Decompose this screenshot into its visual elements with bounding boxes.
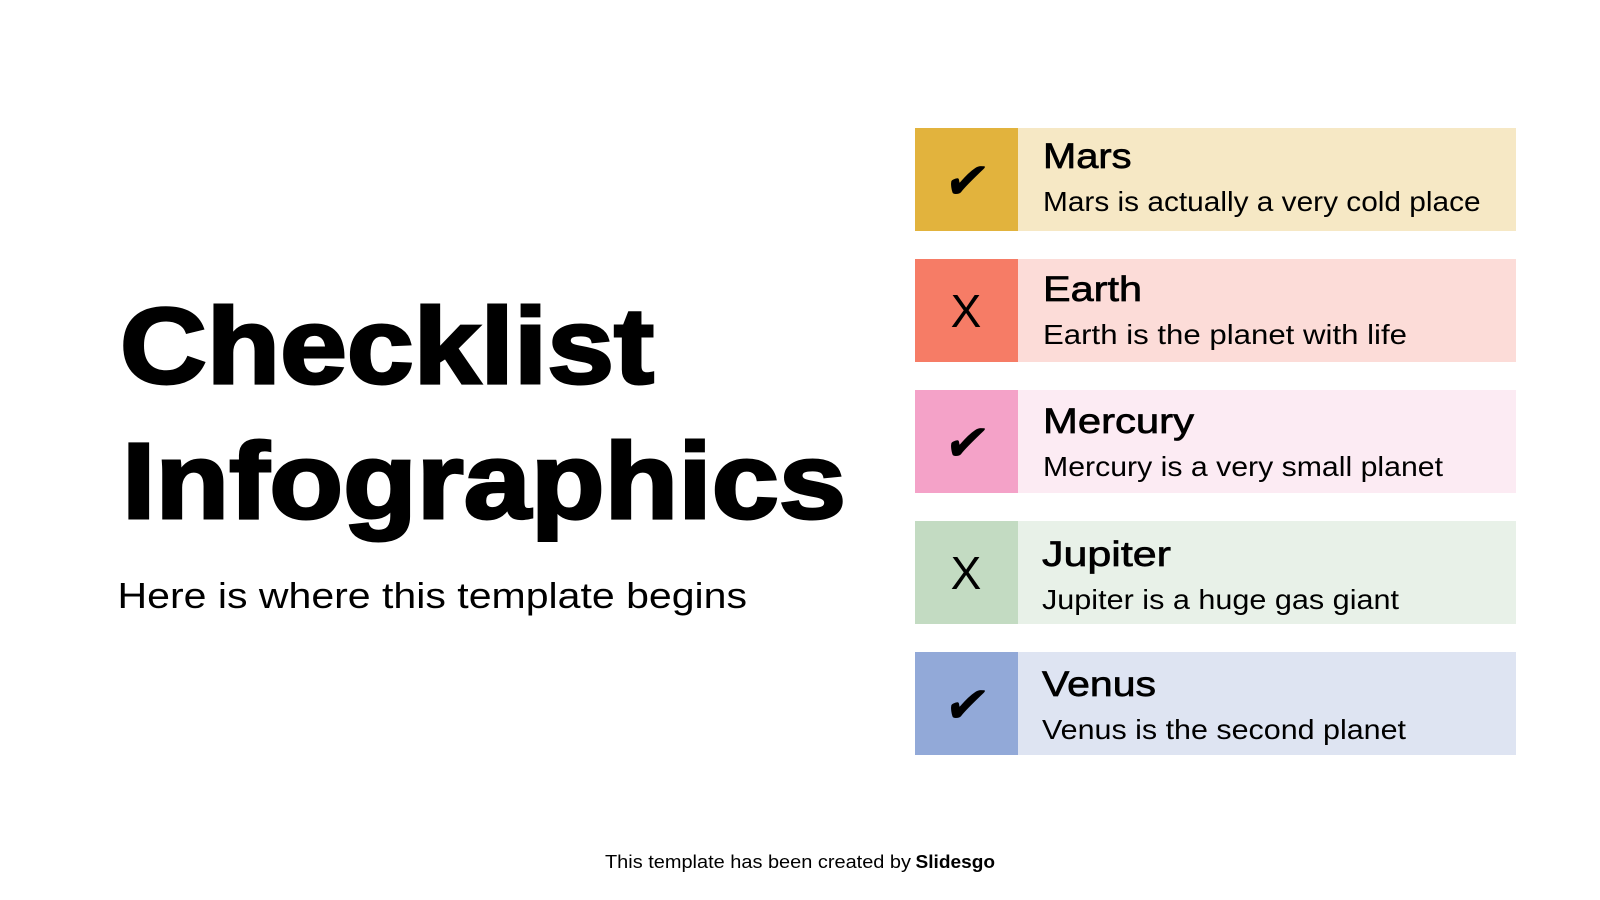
panel: Mercury: Mercury is a very small planet [1043,451,1443,482]
panel: Venus: Venus [1042,664,1156,704]
panel: Jupiter: X [951,547,981,599]
panel: Jupiter: Jupiter [1042,534,1171,574]
panel: Earth [915,259,1516,362]
icon: Jupiter cross [915,521,1018,624]
panel: Mercury [915,390,1516,493]
icon: Mercury check [915,390,1018,493]
panel: Mars: ✔ [941,151,993,210]
title: Infographics [122,420,846,541]
panel: Earth: X [951,285,981,337]
icon: Earth cross [915,259,1018,362]
panel: Venus [915,652,1516,755]
subtitle: Here is where this template begins [118,575,747,616]
panel: Venus: ✔ [941,675,993,734]
footer credit: Slidesgo [916,852,995,872]
footer credit: This template has been created by [605,852,911,872]
panel: Jupiter: Jupiter is a huge gas giant [1042,584,1399,615]
icon: Mars check [915,128,1018,231]
panel: Earth: Earth is the planet with life [1043,319,1407,350]
panel: Venus: Venus is the second planet [1042,714,1406,745]
title: Checklist [120,285,654,406]
panel: Mercury: Mercury [1043,401,1194,441]
panel: Mars: Mars [1043,136,1132,176]
panel: Mercury: ✔ [941,413,993,472]
panel: Jupiter [915,521,1516,624]
title [120,285,846,541]
panel: Earth: Earth [1043,269,1142,309]
panel: Mars: Mars is actually a very cold place [1043,186,1481,217]
panel: Mars [915,128,1516,231]
icon: Venus check [915,652,1018,755]
